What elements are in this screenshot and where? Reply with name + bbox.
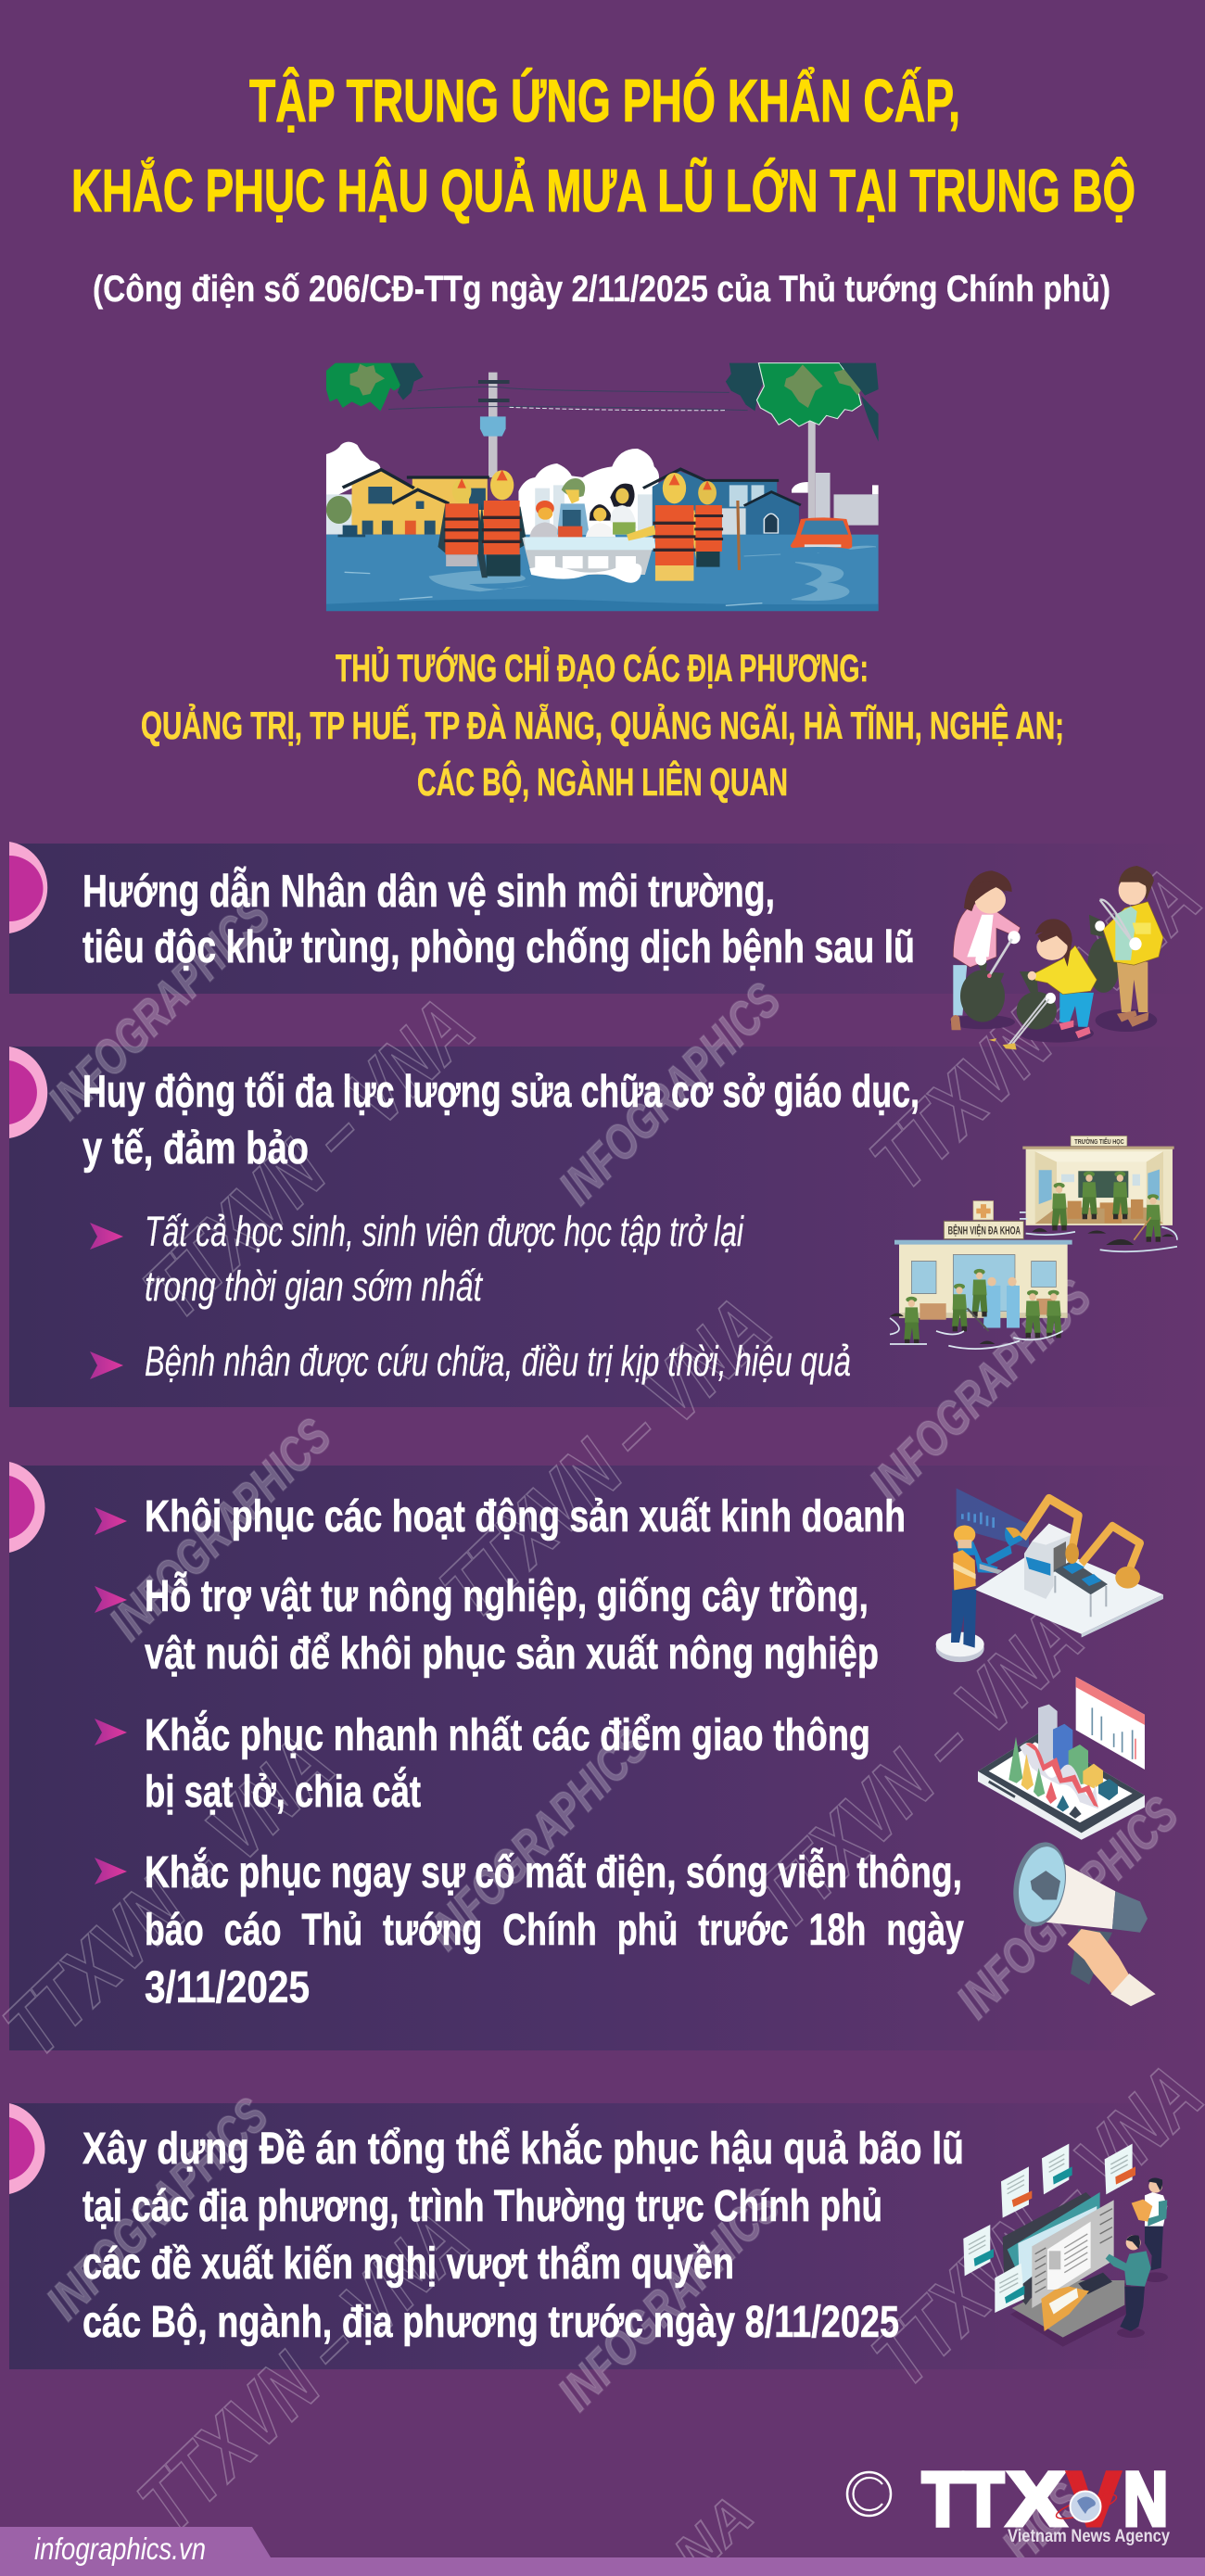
panel: education and health: [9, 1047, 1205, 1407]
bullet arrow: [95, 1858, 127, 1884]
panel: overall plan: [9, 2103, 1205, 2369]
circle marker 2: [9, 1047, 47, 1138]
instruction heading: CÁC BỘ, NGÀNH LIÊN QUAN: [417, 759, 788, 804]
text: recovery bullets: [95, 1492, 964, 2012]
illustration: megaphone in hand: [1006, 1836, 1156, 2006]
bullet arrow: [95, 1719, 127, 1745]
text: item 2: y tế, đảm bảo: [82, 1123, 309, 1174]
watermarks: [0, 851, 1205, 2576]
bullet arrow: [90, 1223, 123, 1250]
bullet text: students: [145, 1208, 744, 1310]
illustration: school and hospital repairs: BỆNH VIỆN ĐA KHOA: [948, 1225, 1021, 1237]
watermarks: INFOGRAPHICS: [38, 887, 281, 1130]
watermarks: INFOGRAPHICS: [99, 1408, 342, 1651]
panel: recovery actions: [9, 1462, 1205, 2050]
text: item 1: Hướng dẫn Nhân dân vệ sinh môi trường,: [82, 867, 775, 917]
text: item 2: [82, 1067, 920, 1385]
instruction heading: THỦ TƯỚNG CHỈ ĐẠO CÁC ĐỊA PHƯƠNG:: [336, 645, 869, 690]
bullet text: power and telecom: Khắc phục ngay sự cố mất điện, sóng viễn thông,: [145, 1846, 962, 1897]
illustration: family cleaning up: [950, 866, 1163, 1049]
watermarks: TTXVN – VNA: [121, 2193, 486, 2550]
bullet text: students: Tất cả học sinh, sinh viên được học tập trở lại: [145, 1208, 744, 1255]
text: item 1: [82, 867, 915, 972]
watermarks: INFOGRAPHICS: [548, 2178, 791, 2421]
bullet arrow: [90, 1351, 123, 1379]
text: item 4: Xây dựng Đề án tổng thể khắc phục hậu quả bão lũ: [82, 2123, 964, 2174]
circle marker 1: [9, 842, 47, 933]
circle marker 3: [9, 1462, 44, 1553]
bullet text: students: trong thời gian sớm nhất: [145, 1263, 484, 1310]
instruction heading: [141, 645, 1064, 804]
bullet text: business recovery: Khôi phục các hoạt động sản xuất kinh doanh: [145, 1492, 906, 1542]
bullet arrow: [95, 1586, 127, 1613]
watermarks: INFOGRAPHICS: [859, 1269, 1102, 1512]
text: item 4: các Bộ, ngành, địa phương trước ngày 8/11/2025: [82, 2298, 899, 2347]
footer band: [0, 2527, 1205, 2576]
bullet text: transport: bị sạt lở, chia cắt: [145, 1766, 421, 1817]
watermarks: TTXVN – VNA: [736, 1591, 1100, 1948]
illustration: school and hospital repairs: TRƯỜNG TIỂU HỌC: [1074, 1137, 1124, 1146]
text: item 1: tiêu độc khử trùng, phòng chống dịch bệnh sau lũ: [82, 922, 915, 972]
watermarks: TTXVN – VNA: [0, 1718, 351, 2075]
logo: TTXVN: N: [1123, 2457, 1168, 2542]
text: item 4: các đề xuất kiến nghị vượt thẩm quyền: [82, 2240, 734, 2289]
bullet text: agriculture: [145, 1571, 879, 1679]
footer site label: infographics.vn: [34, 2532, 206, 2566]
title: [71, 67, 1135, 224]
watermarks: TTXVN – VNA: [127, 981, 491, 1338]
bullet arrow: [95, 1507, 127, 1535]
illustration: school and hospital repairs: [890, 1136, 1177, 1349]
logo: TTXVN: [922, 2457, 1170, 2546]
logo: TTXVN: X: [1008, 2457, 1065, 2542]
watermarks: INFOGRAPHICS: [36, 2087, 279, 2330]
panel: environmental sanitation: [9, 842, 1205, 994]
watermarks: INFOGRAPHICS: [416, 1718, 659, 1961]
illustration: documents and laptop: [963, 2144, 1168, 2347]
watermarks: INFOGRAPHICS: [549, 972, 792, 1215]
watermarks: HICS: [992, 2472, 1094, 2574]
text: item 2: Huy động tối đa lực lượng sửa chữa cơ sở giáo dục,: [82, 1067, 920, 1117]
illustration: automated factory: [936, 1489, 1163, 1662]
text: item 4: tại các địa phương, trình Thường trực Chính phủ: [82, 2182, 882, 2231]
logo: copyright mark: [847, 2472, 891, 2516]
logo: TTXVN: V: [1068, 2457, 1120, 2542]
agency name: Vietnam News Agency: [1008, 2527, 1170, 2546]
watermarks: TTXVN – VNA: [424, 1280, 788, 1637]
bullet text: transport: [145, 1709, 870, 1817]
text: item 4: [82, 2123, 964, 2347]
illustration: flood rescue scene: [326, 363, 879, 611]
logo: TTXVN: TT: [922, 2457, 1004, 2542]
bullet text: agriculture: vật nuôi để khôi phục sản xuất nông nghiệp: [145, 1630, 879, 1679]
bullet text: power and telecom: 3/11/2025: [145, 1963, 310, 2012]
circle marker 4: [9, 2103, 44, 2194]
bullet text: patients: Bệnh nhân được cứu chữa, điều trị kịp thời, hiệu quả: [145, 1338, 851, 1385]
bullet text: transport: Khắc phục nhanh nhất các điểm giao thông: [145, 1709, 870, 1760]
bullet text: power and telecom: [145, 1846, 964, 2012]
bullet text: agriculture: Hỗ trợ vật tư nông nghiệp, giống cây trồng,: [145, 1571, 869, 1621]
illustration: data charts on tablet: [978, 1677, 1145, 1840]
